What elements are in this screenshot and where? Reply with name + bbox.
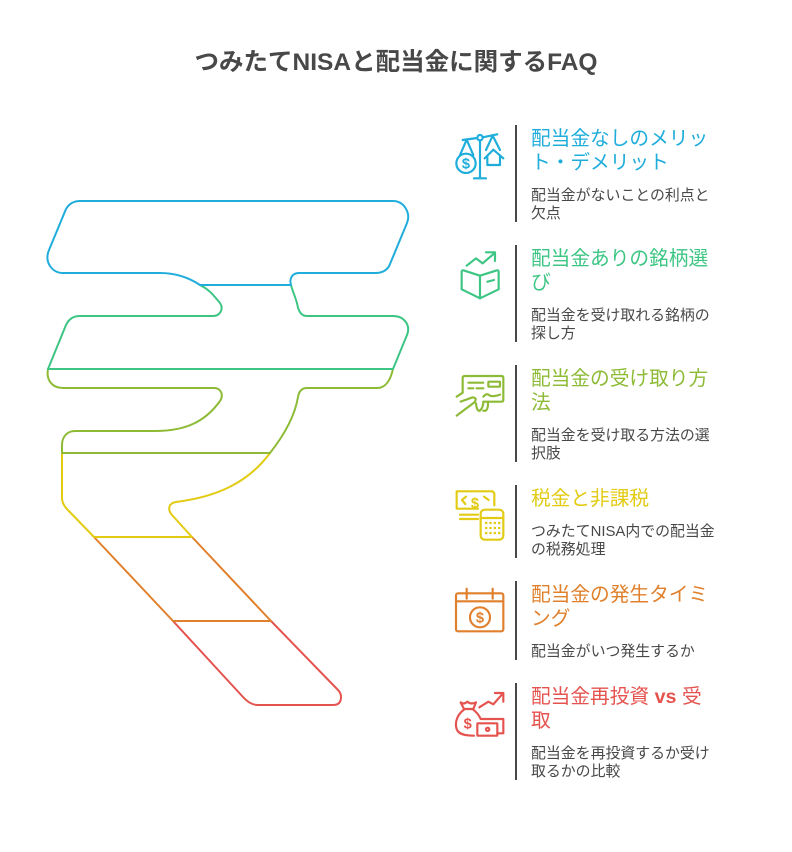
divider bar <box>515 365 517 462</box>
description: 探し方 <box>531 325 576 342</box>
segment: red base <box>173 621 341 705</box>
description: 取るかの比較 <box>531 763 620 780</box>
item 4: tax and tax exemption <box>457 485 715 558</box>
heading: 配当金の発生タイミ <box>531 584 708 606</box>
description: 配当金がいつ発生するか <box>531 643 695 660</box>
divider bar <box>515 245 517 342</box>
title: つみたてNISAと配当金に関するFAQ <box>195 48 597 76</box>
description: 配当金を受け取れる銘柄の <box>531 307 710 324</box>
item 3: how to receive dividends <box>457 365 710 462</box>
item 6: reinvest versus receive <box>456 683 710 780</box>
heading: 配当金なしのメリッ <box>531 128 708 150</box>
heading: 取 <box>531 710 551 732</box>
icon: calendar with dollar <box>456 589 503 631</box>
icon: cheque with signing hand <box>457 376 503 416</box>
heading: 税金と非課税 <box>531 488 649 510</box>
icon: scale with money and house: $ <box>462 157 470 173</box>
item 2: choosing dividend stocks <box>462 245 710 342</box>
heading: び <box>531 272 551 294</box>
divider bar <box>515 125 517 222</box>
icon: money bag, cash and arrow: $ <box>464 716 472 732</box>
segment: blue top <box>47 201 408 285</box>
heading: 配当金の受け取り方 <box>531 368 708 390</box>
item 1: dividend-free pros and cons <box>456 125 710 222</box>
divider bar <box>515 581 517 660</box>
icon: banknotes and calculator: $ <box>471 496 479 512</box>
segment: orange <box>94 537 271 621</box>
icon: calendar with dollar: $ <box>476 611 484 627</box>
description: 配当金を再投資するか受け <box>531 745 710 762</box>
description: の税務処理 <box>531 541 606 558</box>
description: 配当金を受け取る方法の選 <box>531 427 710 444</box>
description: つみたてNISA内での配当金 <box>531 523 715 540</box>
heading: 配当金再投資 vs 受 <box>531 686 702 708</box>
rupee funnel diagram <box>47 201 408 705</box>
divider bar <box>515 683 517 780</box>
description: 配当金がないことの利点と <box>531 187 710 204</box>
heading: 法 <box>531 392 551 414</box>
description: 欠点 <box>531 205 561 222</box>
icon: money bag, cash and arrow <box>456 693 503 736</box>
segment: yellow <box>62 453 270 537</box>
item 5: dividend timing <box>456 581 708 660</box>
heading: ト・デメリット <box>531 152 669 174</box>
heading: ング <box>531 608 570 630</box>
heading: 配当金ありの銘柄選 <box>531 248 708 270</box>
icon: banknotes and calculator <box>457 491 503 540</box>
description: 択肢 <box>531 445 561 462</box>
segment: green <box>48 285 408 369</box>
icon: open book with rising arrow <box>462 252 499 298</box>
icon: scale with money and house <box>456 134 503 178</box>
segment: olive <box>48 369 393 453</box>
divider bar <box>515 485 517 558</box>
